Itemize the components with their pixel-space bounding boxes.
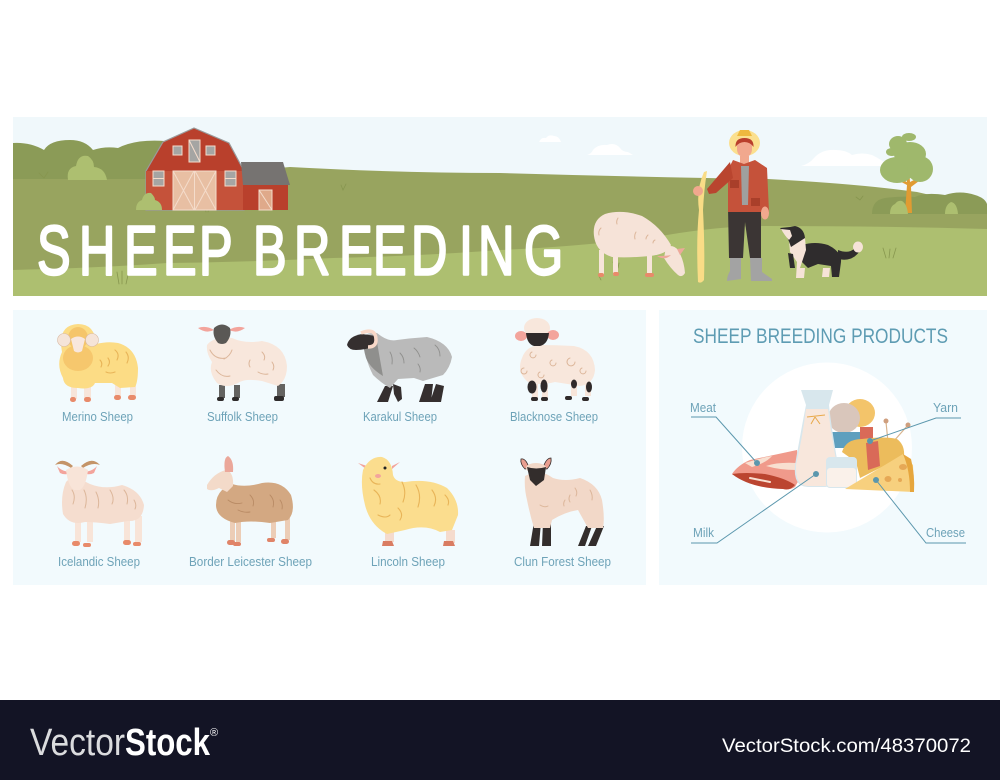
woolly body [594, 212, 671, 257]
Clun Forest Sheep [521, 458, 604, 546]
Icelandic Sheep [55, 461, 144, 547]
legs [532, 382, 591, 398]
far hills right [872, 192, 987, 214]
tail [838, 249, 859, 260]
hooves [598, 272, 654, 277]
ears [657, 248, 685, 258]
tree [880, 133, 933, 213]
horns [55, 461, 100, 468]
knitting needles [886, 422, 908, 442]
fat stripe [750, 478, 770, 482]
Border Leicester Sheep [207, 456, 293, 546]
fat marbling [745, 456, 796, 470]
mid hill [13, 167, 987, 270]
Blacknose Sheep [515, 318, 595, 401]
Lincoln label: Lincoln Sheep [371, 555, 445, 569]
milk label: Milk [693, 526, 715, 540]
head [780, 226, 805, 247]
fleece [59, 324, 138, 388]
wedge top [845, 454, 914, 492]
VectorStock logo [30, 722, 218, 764]
footer background [0, 700, 1000, 780]
bushes right [890, 201, 958, 214]
sky [13, 117, 987, 204]
ears [358, 462, 400, 469]
leg patches [528, 380, 592, 401]
legs [219, 384, 285, 398]
wool curls [100, 350, 128, 373]
horns [58, 334, 98, 346]
leader lines [691, 417, 966, 543]
top knot [524, 318, 550, 338]
foliage [880, 133, 933, 183]
barn door [173, 171, 216, 210]
neck and head [737, 142, 752, 164]
wool lines [370, 478, 449, 520]
hind foot [822, 268, 830, 277]
meat [732, 450, 800, 490]
front meadow [13, 226, 987, 296]
raw cut [732, 450, 800, 489]
legs [230, 518, 290, 542]
eye [384, 466, 386, 470]
legs [377, 384, 444, 402]
hand [693, 186, 703, 196]
lower yarn skein [842, 438, 904, 478]
registered mark: ® [210, 727, 218, 739]
wool curls [599, 218, 655, 243]
head [66, 466, 88, 490]
trunk [902, 178, 918, 213]
head [347, 334, 376, 350]
Blacknose label: Blacknose Sheep [510, 410, 598, 424]
Lincoln Sheep [358, 457, 458, 546]
annex roof [241, 162, 290, 185]
bush by barn [136, 193, 162, 210]
milk [796, 409, 837, 486]
needle tops [884, 418, 910, 428]
legs [530, 522, 604, 546]
yarn label: Yarn [933, 401, 958, 415]
wool lines [228, 495, 282, 512]
ears [198, 327, 245, 332]
barn windows [153, 140, 236, 186]
Icelandic label: Icelandic Sheep [58, 555, 140, 569]
nose [375, 474, 381, 478]
horn [361, 331, 376, 347]
milk glass [826, 457, 857, 488]
fleece [216, 482, 293, 523]
meat label: Meat [690, 401, 716, 415]
mane [63, 345, 93, 371]
white circle [742, 362, 912, 532]
hooves [382, 541, 455, 546]
staff [697, 171, 707, 283]
fleece [207, 338, 287, 386]
fleece [520, 345, 595, 386]
boots [727, 258, 772, 281]
products heading: SHEEP BREEDING PRODUCTS [693, 325, 948, 348]
wool curls [210, 350, 274, 376]
fleece [525, 472, 604, 528]
legs [71, 385, 136, 399]
panel: sheep breeds [13, 310, 646, 585]
fleece [362, 457, 458, 534]
hooves [227, 538, 289, 546]
tail tip [853, 242, 863, 252]
panel: landscape banner [13, 117, 987, 296]
grass tufts [116, 184, 896, 284]
face top [526, 463, 546, 473]
hooves [217, 396, 284, 401]
wool lines [390, 345, 440, 372]
white chest [789, 238, 806, 278]
top knot [68, 327, 88, 349]
bow [807, 415, 825, 424]
barn main body [146, 128, 244, 210]
rind [903, 454, 914, 492]
legs [599, 250, 652, 277]
beige ball [828, 403, 860, 433]
legs [385, 530, 455, 543]
yellow ball [845, 399, 875, 427]
body and hind legs [802, 243, 841, 277]
annex [243, 185, 288, 210]
Merino label: Merino Sheep [62, 410, 133, 424]
shirt [741, 166, 749, 205]
sheepdog [780, 226, 863, 278]
annex door [259, 190, 272, 210]
glass body [826, 457, 857, 488]
ears [57, 466, 97, 474]
hooves [72, 540, 141, 547]
fleece [62, 478, 144, 524]
wool lines [540, 488, 592, 507]
milk in glass [827, 468, 856, 487]
clouds [539, 135, 890, 166]
ear [224, 456, 233, 472]
hooves [70, 395, 136, 402]
farmer [693, 130, 772, 283]
hat [729, 130, 760, 156]
raised paw [788, 253, 795, 268]
panel background [659, 310, 987, 585]
image id: VectorStock.com/48370072 [722, 736, 971, 757]
holes [884, 464, 907, 482]
black face [527, 467, 546, 486]
legs [75, 516, 142, 542]
cheese [845, 454, 914, 492]
head [664, 246, 685, 276]
trousers [728, 208, 761, 258]
left arm [707, 162, 733, 194]
glass [795, 390, 838, 487]
Suffolk Sheep [198, 324, 287, 401]
cross section [732, 473, 795, 490]
leader dots [754, 438, 879, 483]
curls [521, 352, 586, 378]
Merino Sheep [58, 324, 138, 402]
bush left [68, 156, 107, 180]
jacket [728, 160, 769, 212]
head [214, 324, 230, 344]
panel background [13, 310, 646, 585]
barn lower front [146, 171, 244, 210]
ears [521, 458, 551, 469]
fleece [363, 333, 452, 388]
footer bar [0, 700, 1000, 780]
face [526, 333, 549, 346]
hair [735, 138, 754, 147]
Border Leicester label: Border Leicester Sheep [189, 555, 312, 569]
head [207, 470, 233, 492]
Suffolk label: Suffolk Sheep [207, 410, 278, 424]
neck shade [363, 336, 383, 376]
red band [860, 427, 873, 447]
yarn balls [828, 399, 910, 478]
panel: sheep breeding products [659, 310, 987, 585]
white blaze [781, 229, 792, 240]
cheese label: Cheese [926, 526, 965, 540]
face [71, 336, 85, 352]
grazing sheep [594, 212, 685, 277]
pockets [730, 180, 760, 206]
Clun Forest label: Clun Forest Sheep [514, 555, 611, 569]
wool lines [72, 490, 136, 509]
far hills left [13, 140, 164, 179]
blue band [832, 432, 860, 448]
title: SHEEP BREEDING [37, 211, 563, 289]
Karakul label: Karakul Sheep [363, 410, 437, 424]
barn [146, 128, 290, 210]
right hand [761, 206, 769, 220]
skein band [866, 441, 880, 470]
logo bold part: Stock [125, 722, 211, 764]
ears [515, 331, 527, 341]
logo thin part: Vector [30, 722, 125, 764]
milk jug [795, 390, 838, 487]
Karakul Sheep [347, 331, 452, 402]
